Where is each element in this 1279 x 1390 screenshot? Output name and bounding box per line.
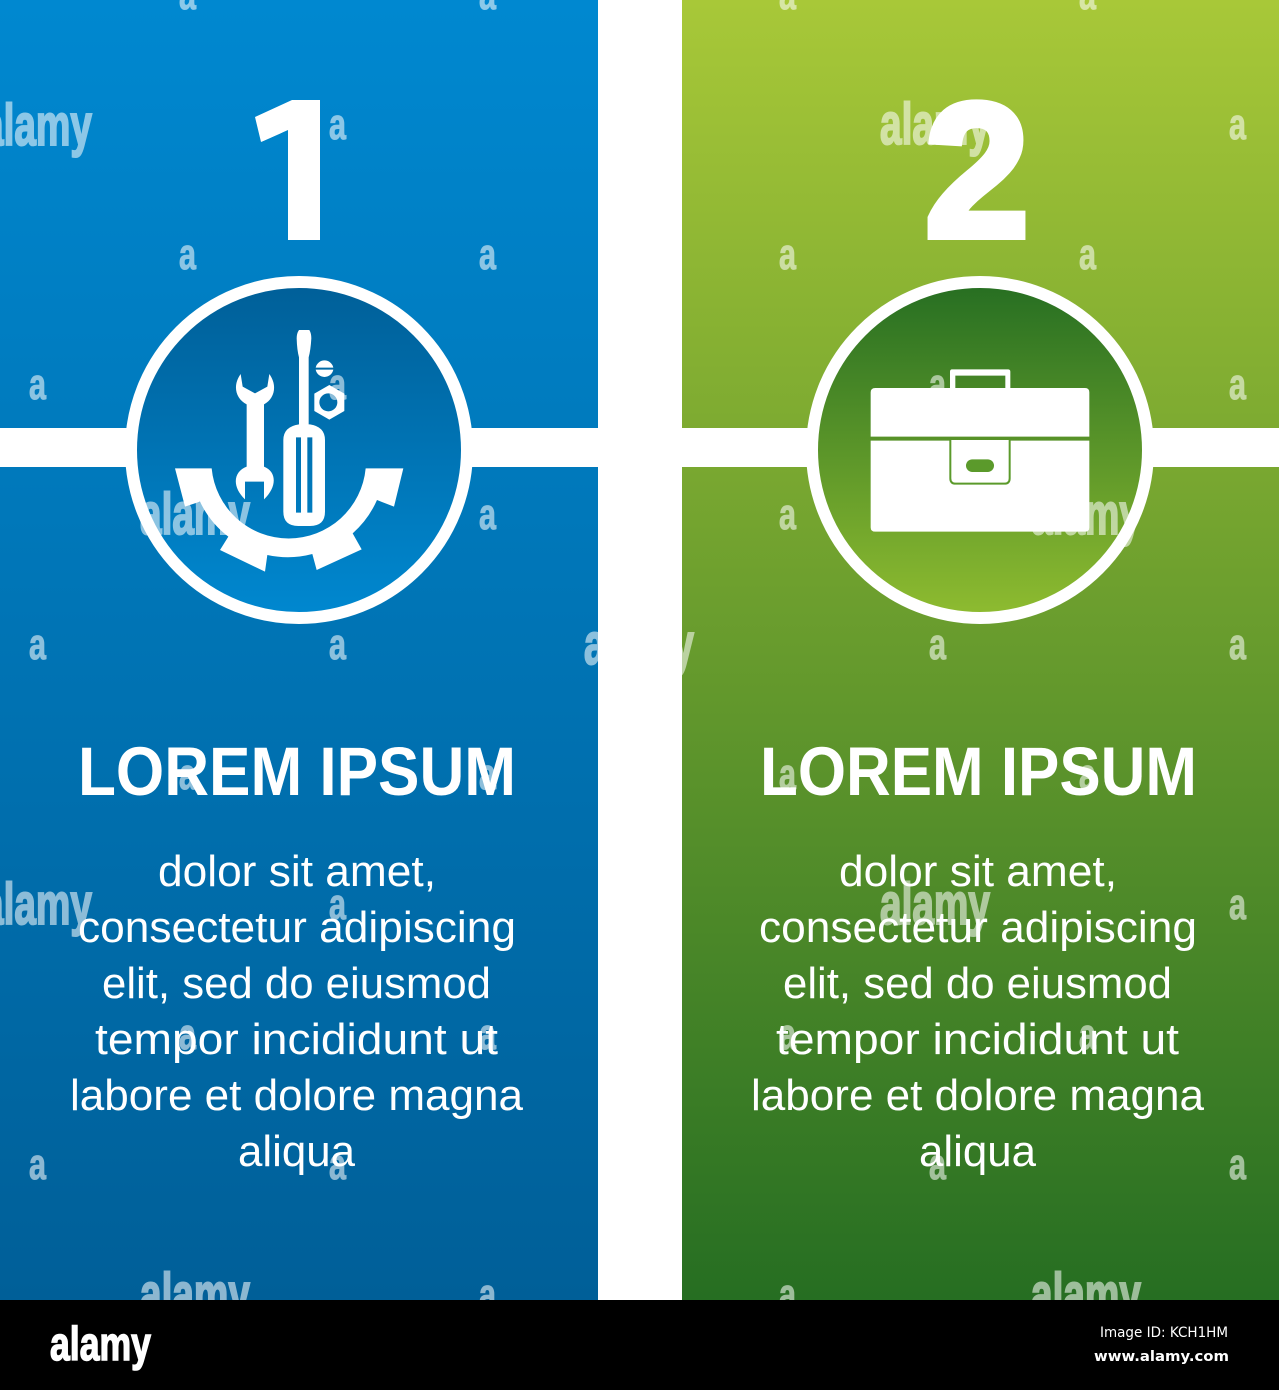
icon part: screw head [316,360,333,377]
watermarks: a [329,620,346,669]
icon part: clasp [950,440,1010,484]
watermarks: a [1079,230,1096,279]
watermarks: a [329,880,346,929]
watermarks: a [329,100,346,149]
body text: labore et dolore magna [751,1071,1205,1120]
watermarks: a [29,1140,46,1189]
watermarks: alamy [880,92,990,157]
body text: dolor sit amet, [158,847,436,896]
watermarks: a [479,750,496,799]
connector bar: left [0,428,130,467]
watermarks: a [929,360,946,409]
number 2: 2 [925,65,1029,277]
connector bar: right [468,428,598,467]
body text [70,847,524,1176]
watermarks: a [179,230,196,279]
watermarks: a [779,1010,796,1059]
body text: elit, sed do eiusmod [102,959,491,1008]
body text: tempor incididunt ut [95,1015,498,1064]
watermarks: a [1229,880,1246,929]
panel: step 2 [682,0,1279,1300]
icon part: wrench [236,374,274,499]
watermarks: a [779,230,796,279]
watermarks: alamy [140,1262,250,1327]
footer bar [0,1300,1279,1390]
connector bar: right [1149,428,1279,467]
connector bar: left [682,428,812,467]
icon part: hex nut [314,385,344,420]
watermarks: a [779,1270,796,1319]
watermarks: a [479,1010,496,1059]
watermarks: a [29,620,46,669]
icon: gear with tools [175,330,403,572]
watermarks: a [329,1140,346,1189]
watermarks: a [779,750,796,799]
icon part: clasp slot [966,459,994,472]
watermarks: a [1229,100,1246,149]
watermarks: a [779,490,796,539]
watermarks: a [479,490,496,539]
image id: Image ID: KCH1HM [1100,1325,1228,1341]
icon part: case body [871,441,1089,532]
watermarks: a [179,1010,196,1059]
body text: tempor incididunt ut [776,1015,1179,1064]
watermarks: alamy [1031,482,1141,547]
watermarks: alamy [140,482,250,547]
body text: aliqua [238,1127,356,1176]
watermarks: alamy [584,612,694,677]
circle badge [131,282,467,618]
watermarks: alamy [1031,1262,1141,1327]
number 1: 1 [250,60,350,283]
watermarks: a [929,1140,946,1189]
watermarks: a [479,230,496,279]
watermarks: a [1079,750,1096,799]
icon part: screwdriver [283,330,325,526]
icon: briefcase [871,369,1089,532]
icon part: case lid [871,388,1089,437]
body text: consectetur adipiscing [759,903,1197,952]
body text: aliqua [919,1127,1037,1176]
heading: LOREM IPSUM [760,733,1197,810]
body text: consectetur adipiscing [78,903,516,952]
watermarks: a [1079,1010,1096,1059]
heading: LOREM IPSUM [78,733,516,810]
body text: labore et dolore magna [70,1071,524,1120]
body text [751,847,1205,1176]
watermarks: a [479,1270,496,1319]
panel background: green [682,0,1279,1300]
icon part: half gear [175,468,403,572]
body text: dolor sit amet, [839,847,1117,896]
watermarks: a [1229,620,1246,669]
panel: step 1 [0,0,598,1300]
website: www.alamy.com [1094,1349,1229,1365]
watermarks: alamy [880,872,990,937]
watermarks: a [929,620,946,669]
circle badge [812,282,1148,618]
footer logo: alamy [50,1317,151,1370]
watermarks: a [1229,360,1246,409]
body text: elit, sed do eiusmod [783,959,1172,1008]
watermarks: a [29,360,46,409]
watermarks: a [179,750,196,799]
icon part: handle [950,369,1010,389]
panel background: blue [0,0,598,1300]
watermarks: a [329,360,346,409]
watermarks: a [1229,1140,1246,1189]
